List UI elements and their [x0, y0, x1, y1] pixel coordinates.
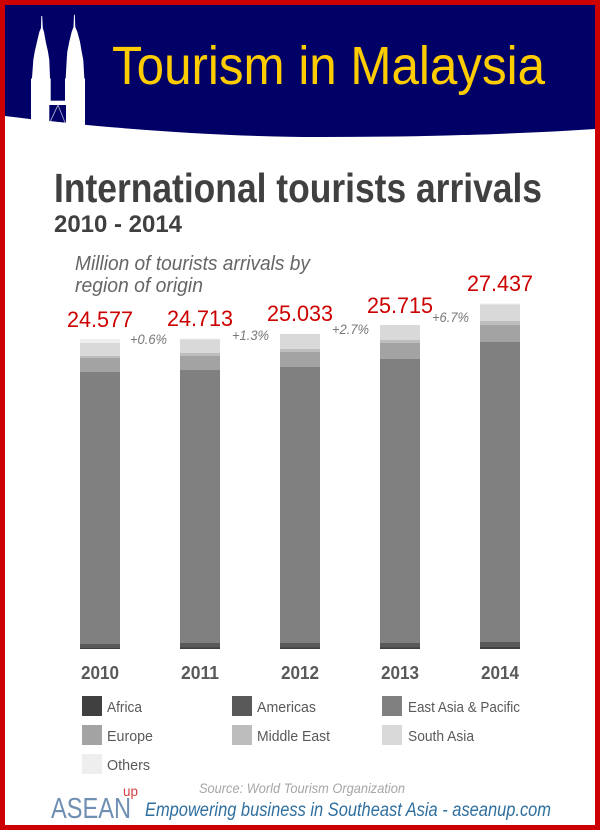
legend	[82, 696, 520, 774]
bar: 2010	[80, 339, 120, 649]
year axis labels: 2012	[281, 663, 319, 683]
legend item: Others: Others	[107, 757, 150, 774]
banner title: Tourism in Malaysia	[112, 36, 546, 96]
logo: ASEANup	[51, 783, 138, 825]
chart subtitle	[75, 253, 311, 297]
year axis labels	[81, 663, 519, 683]
growth percentages: +6.7%	[432, 309, 469, 325]
legend item: Europe	[82, 725, 153, 745]
growth percentages: +0.6%	[130, 331, 167, 347]
bar: 2012	[280, 334, 320, 649]
legend item: Africa	[82, 696, 143, 716]
bar value labels	[67, 271, 533, 332]
bar: 2011	[180, 338, 220, 649]
year axis labels: 2010	[81, 663, 119, 683]
bar value labels: 25.715	[367, 293, 433, 318]
legend item: East Asia & Pacific: East Asia & Pacific	[408, 699, 520, 716]
logo: ASEANup: up	[123, 783, 138, 799]
legend item: Americas	[232, 696, 316, 716]
legend item: South Asia	[382, 725, 475, 745]
date range subtitle: 2010 - 2014	[54, 211, 183, 238]
bar value labels: 24.713	[167, 306, 233, 331]
year axis labels: 2014	[481, 663, 519, 683]
year axis labels: 2013	[381, 663, 419, 683]
bar value labels: 27.437	[467, 271, 533, 296]
bar value labels: 24.577	[67, 307, 133, 332]
growth percentages	[130, 309, 469, 347]
legend item: Middle East	[232, 725, 331, 745]
growth percentages: +1.3%	[232, 327, 269, 343]
stacked bar chart	[80, 304, 520, 649]
header banner	[5, 5, 595, 137]
legend item: Americas: Americas	[257, 699, 316, 716]
legend item: Middle East: Middle East	[257, 728, 331, 745]
chart subtitle: Million of tourists arrivals by	[75, 253, 311, 275]
source note: Source: World Tourism Organization	[199, 780, 405, 796]
legend item: Others	[82, 754, 150, 774]
legend item: Europe: Europe	[107, 728, 153, 745]
growth percentages: +2.7%	[332, 321, 369, 337]
bar value labels: 25.033	[267, 301, 333, 326]
icon: Petronas twin towers	[31, 15, 85, 127]
bar: 2014	[480, 304, 520, 649]
legend item: Africa: Africa	[107, 699, 143, 716]
year axis labels: 2011	[181, 663, 219, 683]
logo: ASEANup: ASEAN	[51, 793, 131, 825]
chart subtitle: region of origin	[75, 275, 203, 297]
bar: 2013	[380, 325, 420, 649]
legend item: South Asia: South Asia	[408, 728, 475, 745]
legend item: East Asia & Pacific	[382, 696, 520, 716]
